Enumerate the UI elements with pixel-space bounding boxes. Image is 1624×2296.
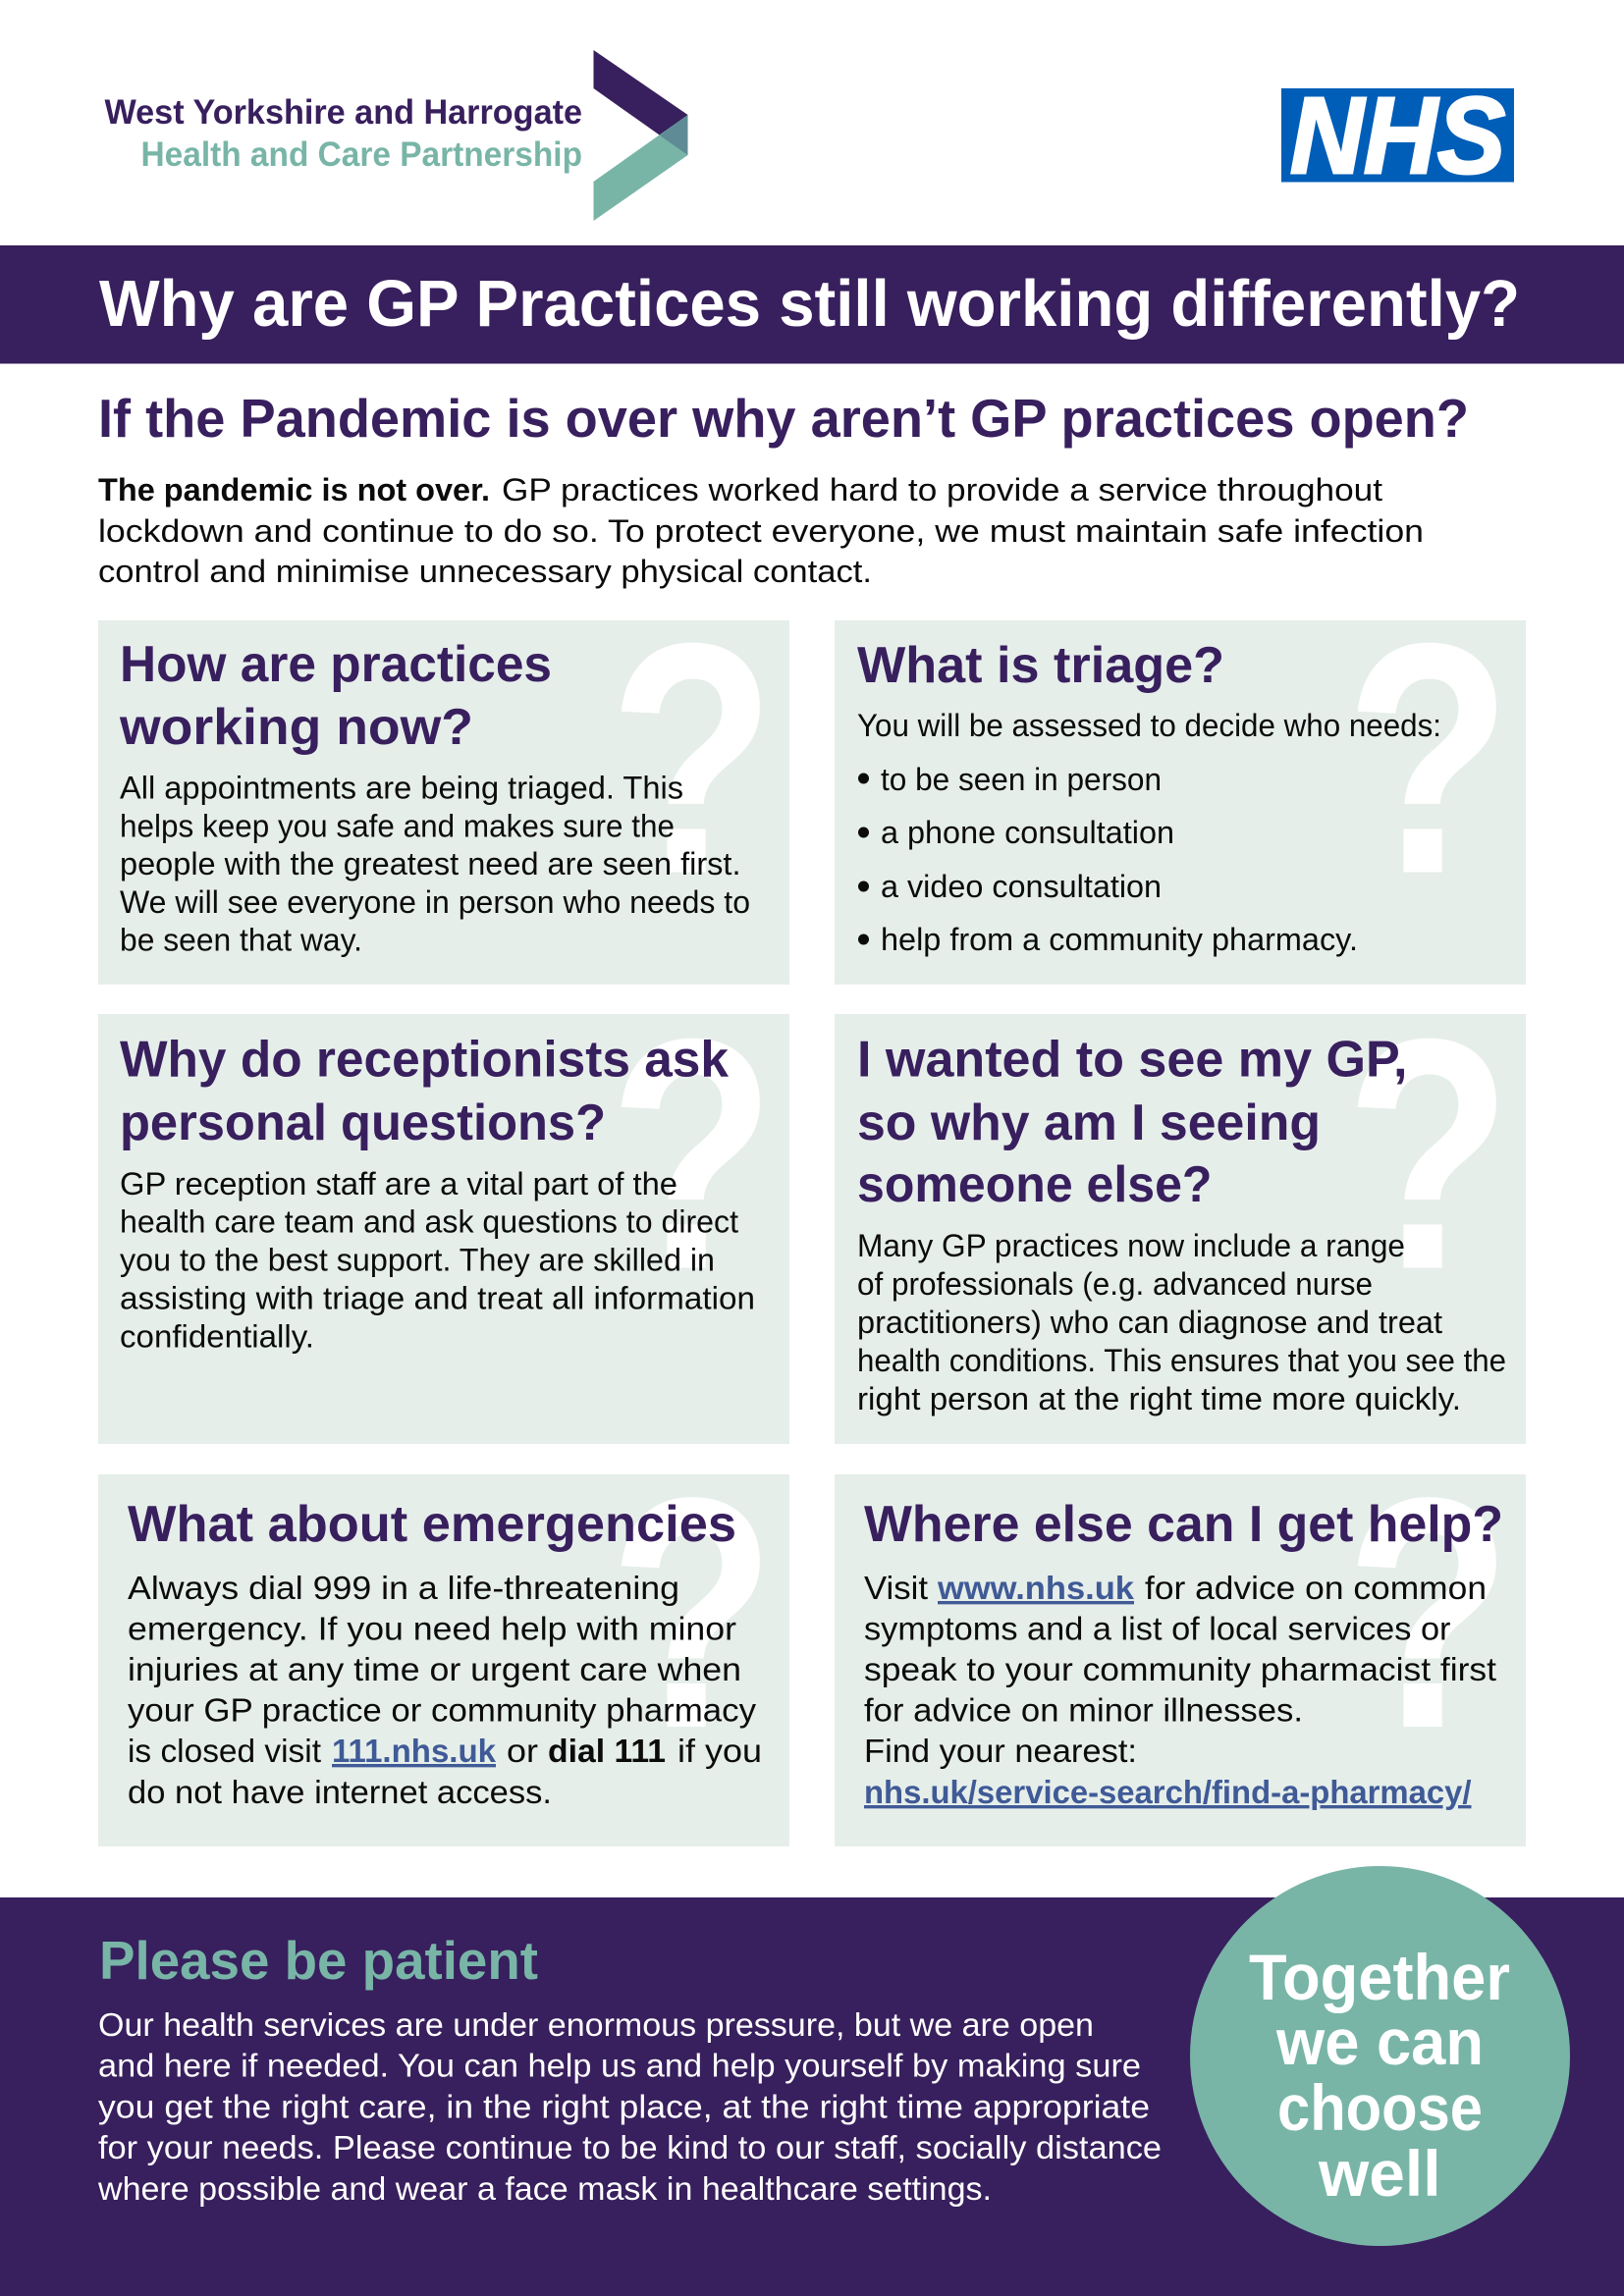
panel: What is triage? [835,575,1526,985]
body text: health care team and ask questions to direct [120,1203,738,1239]
intro paragraph: GP practices worked hard to provide a service throughout [502,472,1382,507]
heading: What about emergencies [128,1496,736,1553]
body text: assisting with triage and treat all information [120,1280,755,1315]
heading: What is triage? [857,637,1224,694]
body text: confidentially. [120,1319,314,1355]
body text: people with the greatest need are seen first. [120,846,740,881]
panel: Why do receptionists ask personal questions? [98,971,789,1444]
heading: working now? [119,699,473,756]
body text and bullet list: to be seen in person [881,762,1162,797]
body text: do not have internet access. [128,1775,552,1811]
panel: How are practices working now? [98,575,789,985]
panel: I wanted to see my GP: ? [1345,971,1512,1338]
callout circle: Together we can choose well: choose [1277,2071,1483,2144]
title banner [0,245,1624,363]
footer body text [97,2007,1162,2208]
intro paragraph: control and minimise unnecessary physical contact. [98,554,872,589]
body text [864,1571,1497,1811]
body text: helps keep you safe and makes sure the [120,809,675,844]
body text: your GP practice or community pharmacy [128,1692,756,1730]
body text: emergency. If you need help with minor [128,1612,736,1647]
heading [857,1031,1408,1213]
body text: GP reception staff are a vital part of the [120,1166,677,1201]
footer heading: Please be patient [99,1930,538,1991]
heading [119,636,552,756]
intro paragraph: lockdown and continue to do so. To protect everyone, we must maintain safe infection [98,513,1424,549]
body text: www.nhs.uk [937,1571,1134,1607]
title banner: Why are GP Practices still working differently? [99,267,1520,341]
logo text line 1: West Yorkshire and Harrogate [104,93,582,132]
callout circle: Together we can choose well: well [1318,2137,1441,2210]
body text [120,770,750,958]
heading: I wanted to see my GP, [857,1031,1408,1088]
panel: Where else can I get help? [835,1429,1526,1846]
body text: be seen that way. [120,923,362,958]
heading: someone else? [857,1156,1212,1213]
body text [128,1571,762,1811]
body text: for advice on minor illnesses. [864,1692,1303,1730]
body text: Visit [864,1571,929,1607]
body text: dial 111 [548,1734,666,1770]
panel: Why do receptionists ask personal questions?: ? [609,971,776,1338]
heading: so why am I seeing [857,1095,1321,1151]
heading: personal questions? [120,1095,606,1151]
body text: We will see everyone in person who needs to [120,884,750,920]
body text: All appointments are being triaged. This [120,770,683,805]
heading: How are practices [120,636,552,693]
body text and bullet list: a video consultation [881,869,1162,904]
panel: What is triage?: ? [1345,575,1512,942]
intro paragraph [98,472,1424,589]
logo: West Yorkshire and Harrogate Health and Care Partnership [104,50,687,221]
body text: right person at the right time more quickly. [857,1381,1461,1416]
body text: nhs.uk/service-search/find-a-pharmacy/ [864,1775,1471,1811]
body text: you to the best support. They are skilled in [120,1243,715,1278]
body text: if you [677,1734,762,1770]
body text: symptoms and a list of local services or [864,1612,1451,1647]
subheading: If the Pandemic is over why aren’t GP practices open? [98,388,1469,449]
heading: Where else can I get help? [864,1496,1503,1553]
body text: or [507,1734,538,1770]
body text: Always dial 999 in a life-threatening [128,1571,679,1607]
panel: What about emergencies [98,1429,789,1846]
body text: of professionals (e.g. advanced nurse [857,1266,1373,1302]
logo: NHS: NHS [1290,76,1505,196]
footer body text: Our health services are under enormous pressure, but we are open [98,2007,1094,2044]
body text and bullet list: help from a community pharmacy. [881,922,1358,957]
footer body text: you get the right care, in the right place, at the right time appropriate [98,2089,1150,2126]
heading: Why do receptionists ask [120,1031,729,1088]
body text: Many GP practices now include a range [857,1228,1405,1263]
body text: health conditions. This ensures that you see the [857,1343,1506,1378]
body text: Find your nearest: [864,1734,1137,1770]
panel: How are practices working now?: ? [609,575,776,942]
panel: I wanted to see my GP [835,971,1526,1444]
callout circle: Together we can choose well: we can [1275,2005,1484,2078]
footer body text: for your needs. Please continue to be kind to our staff, socially distance [98,2130,1162,2166]
intro paragraph: The pandemic is not over. [98,472,490,507]
callout circle: Together we can choose well [1190,1866,1570,2246]
body text: for advice on common [1145,1571,1487,1607]
body text: 111.nhs.uk [332,1734,496,1770]
body text: speak to your community pharmacist first [864,1652,1497,1688]
heading [120,1031,729,1151]
body text: is closed visit [128,1734,322,1770]
body text [120,1166,755,1355]
body text and bullet list: a phone consultation [881,815,1174,850]
panel: Where else can I get help?: ? [1345,1429,1512,1797]
body text [857,1228,1506,1416]
footer body text: and here if needed. You can help us and help yourself by making sure [98,2048,1141,2085]
logo: West Yorkshire and Harrogate Health and Care Partnership: Health and Care Partnership [141,135,582,174]
panel: What about emergencies: ? [609,1429,776,1797]
panel: Please be patient footer [0,1866,1624,2296]
footer body text: where possible and wear a face mask in healthcare settings. [97,2171,992,2208]
body text and bullet list [857,708,1441,957]
body text: practitioners) who can diagnose and treat [857,1305,1442,1340]
callout circle: Together we can choose well: Together [1249,1941,1510,2013]
body text and bullet list: You will be assessed to decide who needs: [857,708,1441,743]
body text: injuries at any time or urgent care when [128,1652,741,1688]
